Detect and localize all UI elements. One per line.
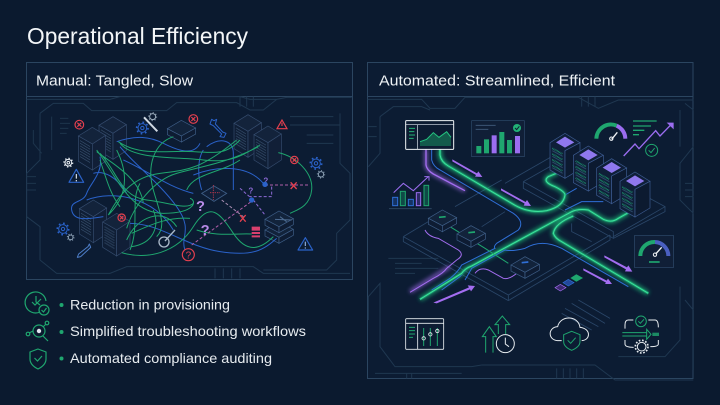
- icon: cloud shield: [550, 318, 588, 350]
- red question badge: ?: [186, 251, 192, 262]
- dashed purple and red failure paths: [192, 185, 310, 245]
- question marks: ?: [263, 176, 268, 185]
- green tangled links: [97, 137, 312, 255]
- server cluster: top left: [78, 117, 126, 170]
- icon: troubleshooting magnifier: [26, 321, 49, 341]
- bottom row and isometric legend: [406, 275, 661, 353]
- blue nodes: [249, 182, 268, 203]
- gear icons: [57, 113, 325, 241]
- red question badge: [182, 249, 194, 262]
- benefit 1: Reduction in provisioning: [70, 296, 230, 312]
- wrench icons: [77, 117, 226, 257]
- red x markers: [240, 182, 297, 222]
- glow under flow lines: [410, 149, 648, 299]
- server cluster: top right: [234, 115, 281, 169]
- gauge top: [596, 125, 625, 140]
- icon: control panel: [406, 319, 444, 349]
- benefit 3: Automated compliance auditing: [70, 350, 272, 366]
- gauge icon: [159, 230, 175, 247]
- isometric pipeline scene: [368, 97, 693, 380]
- purple direction arrows: [433, 159, 632, 303]
- gauge card: [634, 236, 674, 267]
- network switch stack: bottom right: [265, 211, 293, 243]
- network switches: [428, 210, 539, 278]
- benefit 1: [25, 292, 230, 315]
- tangled network diagram: [27, 97, 352, 278]
- benefit 2: [26, 321, 306, 341]
- benefit 3: [30, 349, 272, 369]
- panel: manual: [26, 62, 352, 280]
- icon: speed arrows and clock: [482, 316, 514, 353]
- server row: [550, 133, 650, 217]
- trend arrow and list: [624, 121, 674, 156]
- blue tangled links: [72, 137, 277, 253]
- bar chart card: [472, 121, 524, 157]
- blue warning triangles: [69, 169, 313, 250]
- central router: [202, 185, 227, 201]
- server cluster: bottom left: [79, 200, 130, 256]
- small chart left: [389, 177, 432, 209]
- green flow lines: [420, 149, 648, 299]
- title: Operational Efficiency: [27, 23, 248, 49]
- network switch: top: [167, 120, 196, 142]
- question marks: ?: [196, 199, 205, 215]
- bullet dot: [60, 303, 64, 307]
- bullet dot: [60, 356, 64, 360]
- bullet dot: [60, 330, 64, 334]
- question marks: ?: [201, 223, 210, 239]
- panel heading: automated: Automated: Streamlined, Efficient: [379, 72, 616, 90]
- red error badges: [75, 115, 298, 221]
- benefits list: [25, 292, 306, 369]
- panel heading: manual: Manual: Tangled, Slow: [36, 72, 193, 90]
- icon: shield check: [30, 349, 46, 369]
- panel: automated: [368, 62, 693, 380]
- question marks: [196, 176, 268, 239]
- legend chips: [555, 275, 582, 291]
- purple flow lines: [410, 149, 517, 292]
- icon: automation cycle: [622, 316, 661, 353]
- question marks: ?: [248, 186, 253, 195]
- icon: clock check: [25, 292, 49, 315]
- red stack icon: [252, 227, 260, 237]
- benefit 2: Simplified troubleshooting workflows: [70, 323, 306, 339]
- isometric platforms: [403, 157, 665, 330]
- blue flow lines: [432, 149, 628, 290]
- dashboard window: [406, 121, 454, 149]
